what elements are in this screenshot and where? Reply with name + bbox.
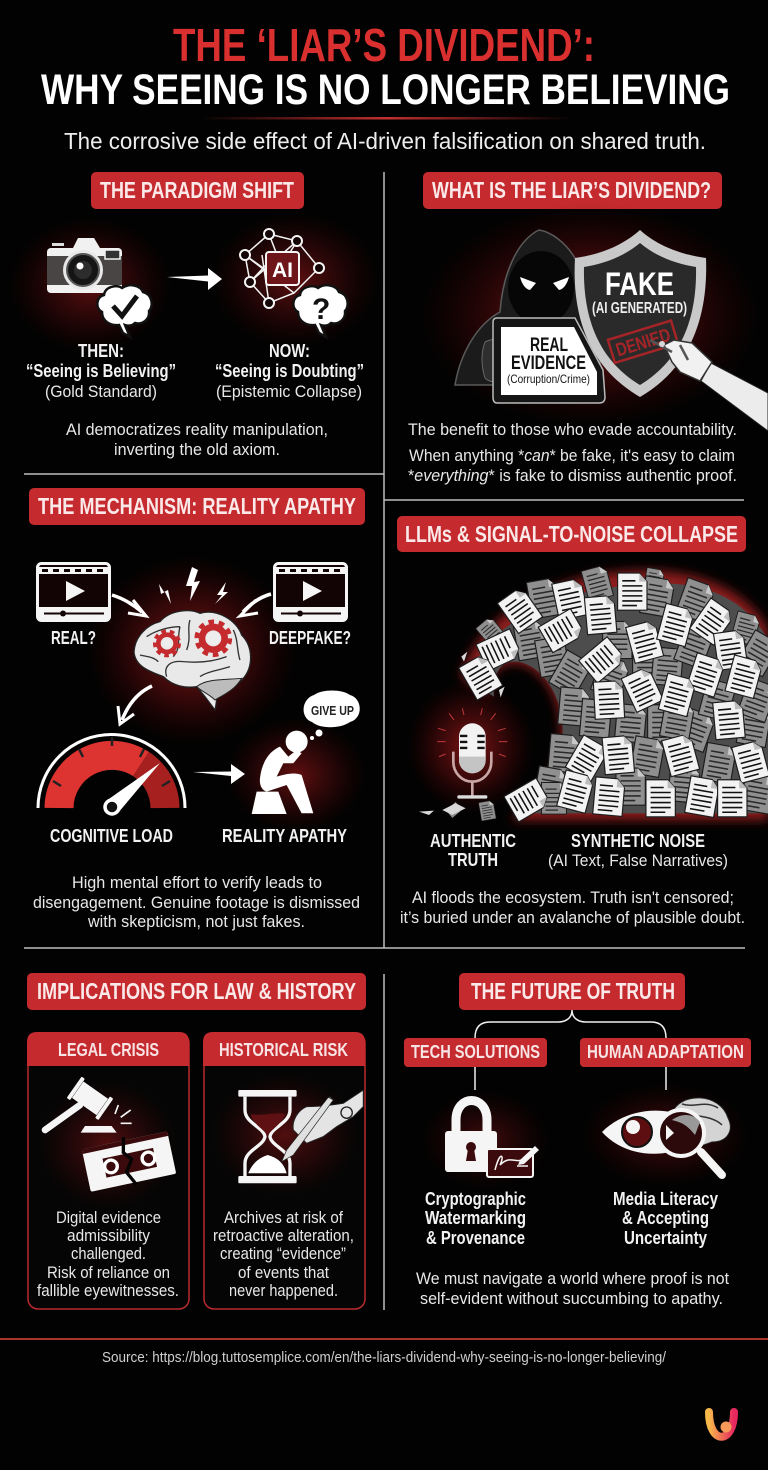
text: llm summary (400, 889, 745, 927)
text: mechanism summary (33, 874, 360, 931)
label: real: REAL? (51, 628, 96, 648)
icon: microphone (437, 708, 507, 799)
panel: the future of truth (404, 973, 751, 1308)
label: deepfake: DEEPFAKE? (269, 628, 351, 648)
heading: implications (27, 973, 366, 1010)
title (41, 19, 730, 114)
text: paradigm summary: AI democratizes reality manipulation, (66, 421, 328, 439)
label: reality apathy: REALITY APATHY (222, 826, 347, 846)
text: llm summary: AI floods the ecosystem. Truth isn't censored; (412, 889, 734, 907)
panel: the paradigm shift (8, 172, 380, 459)
icon: eye magnifier and brain (602, 1098, 730, 1175)
icon: hooded figure (455, 230, 600, 385)
icon: shield fake: (AI GENERATED) (592, 300, 687, 317)
card: historical risk: HISTORICAL RISK (219, 1040, 348, 1060)
icon: shield fake: DENIED (614, 325, 673, 361)
icon: brain with question (293, 285, 348, 337)
text: dividend explanation: When anything *can* be fake, it's easy to claim (409, 447, 735, 465)
heading: the mechanism: THE MECHANISM: REALITY APATHY (38, 493, 356, 519)
text: future summary: self-evident without succumbing to apathy. (420, 1290, 723, 1308)
icon: tablet evidence: REAL (530, 335, 568, 356)
icon: tablet evidence (493, 318, 605, 403)
card: legal crisis (27, 1032, 189, 1309)
panel: llms and signal to noise (397, 516, 768, 927)
label: media literacy: Media Literacy (613, 1189, 718, 1209)
heading: the paradigm shift (91, 172, 304, 209)
arrow: brain to gauge (118, 686, 152, 724)
arrow: gauge to apathy (193, 764, 245, 784)
text: historical risk (213, 1209, 354, 1300)
text: mechanism summary: with skepticism, not just fakes. (87, 913, 305, 931)
icon: brain with check (97, 285, 152, 337)
icon: give up bubble: GIVE UP (311, 704, 354, 718)
icon: AI network (240, 229, 324, 308)
icon: tablet evidence: (Corruption/Crime) (507, 372, 590, 386)
icon: camera (47, 238, 122, 293)
source line: Source: https://blog.tuttosemplice.com/en/the-liars-dividend-why-seeing-is-no-longer-believing/ (102, 1350, 667, 1366)
label: authentic truth: TRUTH (448, 850, 498, 870)
icon: cognitive load gauge (38, 735, 185, 814)
icon: robot arm (650, 340, 768, 431)
panel: what is the liar's dividend (408, 172, 768, 485)
icon: tablet evidence: EVIDENCE (511, 353, 586, 374)
footer rule (0, 1338, 768, 1340)
icon: give up bubble (304, 690, 360, 740)
label: synthetic noise: SYNTHETIC NOISE (571, 831, 705, 851)
text: then: “Seeing is Believing” (26, 361, 176, 381)
text: dividend explanation: *everything* is fake to dismiss authentic proof. (408, 467, 737, 485)
text: legal crisis: Risk of reliance on (47, 1264, 170, 1282)
text: legal crisis: admissibility (67, 1227, 151, 1245)
heading: what is the liar's dividend (423, 172, 722, 209)
icon: gavel and broken tape (45, 1077, 177, 1195)
panel: the mechanism (29, 488, 366, 931)
text: historical risk: retroactive alteration, (213, 1227, 354, 1245)
arrows into brain (112, 594, 271, 616)
icon: deepfake video (274, 564, 346, 620)
heading: future of truth: THE FUTURE OF TRUTH (471, 978, 675, 1004)
text: now: NOW: (269, 341, 310, 361)
label: media literacy (613, 1189, 718, 1248)
icon: lightning bolts (159, 567, 228, 604)
label: media literacy: & Accepting (622, 1208, 709, 1228)
text: historical risk: never happened. (229, 1282, 338, 1300)
bracket connector (475, 1010, 666, 1090)
tag: tech solutions: TECH SOLUTIONS (411, 1042, 540, 1062)
text: dividend explanation (408, 421, 737, 485)
text: then (26, 341, 176, 401)
text: now: (Epistemic Collapse) (216, 383, 362, 401)
text: historical risk: Archives at risk of (224, 1209, 343, 1227)
icon: real video (38, 564, 110, 620)
arrow: then to now (167, 268, 222, 290)
icon: wave of documents (407, 565, 768, 822)
text: future summary: We must navigate a world where proof is not (416, 1270, 729, 1288)
label: synthetic noise (548, 831, 728, 870)
text: historical risk: of events that (238, 1264, 329, 1282)
icon: shield fake (575, 230, 706, 397)
tag: human adaptation (580, 1038, 751, 1067)
label: cryptographic watermarking: & Provenance (426, 1228, 525, 1248)
heading: the paradigm shift: THE PARADIGM SHIFT (100, 177, 294, 203)
icon: shield fake: FAKE (605, 266, 674, 302)
card: legal crisis: LEGAL CRISIS (58, 1040, 159, 1060)
subtitle: The corrosive side effect of AI-driven falsification on shared truth. (64, 128, 706, 154)
title: THE ‘LIAR’S DIVIDEND’: (173, 19, 595, 71)
text: llm summary: it’s buried under an avalanche of plausible doubt. (400, 909, 745, 927)
heading: llms and signal to noise (397, 516, 746, 552)
label: authentic truth (430, 831, 516, 870)
heading: implications: IMPLICATIONS FOR LAW & HISTORY (37, 978, 356, 1004)
label: cognitive load: COGNITIVE LOAD (50, 826, 173, 846)
icon: brain with gears (134, 611, 251, 710)
text: legal crisis: fallible eyewitnesses. (37, 1282, 179, 1300)
label: cryptographic watermarking: Watermarking (425, 1208, 526, 1228)
text: paradigm summary (66, 421, 328, 459)
heading: future of truth (459, 973, 685, 1010)
dividers (24, 172, 745, 1310)
text: historical risk: creating “evidence” (220, 1245, 346, 1263)
icon: brain with question: ? (312, 293, 330, 326)
text: legal crisis: Digital evidence (56, 1209, 161, 1227)
text: then: (Gold Standard) (45, 383, 157, 401)
text: legal crisis (37, 1209, 179, 1300)
text: mechanism summary: High mental effort to verify leads to (72, 874, 322, 892)
text: future summary (416, 1270, 729, 1308)
icon: person in despair (252, 731, 313, 814)
label: media literacy: Uncertainty (624, 1228, 707, 1248)
label: cryptographic watermarking (425, 1189, 526, 1248)
heading: the mechanism (29, 488, 365, 525)
text: then: THEN: (78, 341, 124, 361)
label: synthetic noise: (AI Text, False Narratives) (548, 852, 728, 870)
label: cryptographic watermarking: Cryptographic (425, 1189, 526, 1209)
label: authentic truth: AUTHENTIC (430, 831, 516, 851)
icon: AI network: AI (272, 259, 293, 282)
text: paradigm summary: inverting the old axiom. (114, 441, 280, 459)
icon: logo (709, 1412, 734, 1437)
tag: tech solutions (404, 1038, 547, 1067)
icon: hourglass and robot hand (238, 1090, 363, 1183)
icon: lock and signature (445, 1100, 539, 1177)
text: now (215, 341, 364, 401)
text: dividend explanation: The benefit to those who evade accountability. (408, 421, 737, 439)
panel: implications for law and history (27, 973, 366, 1309)
text: mechanism summary: disengagement. Genuine footage is dismissed (33, 894, 360, 912)
text: legal crisis: challenged. (71, 1245, 146, 1263)
card: historical risk (203, 1032, 365, 1309)
text: now: “Seeing is Doubting” (215, 361, 364, 381)
